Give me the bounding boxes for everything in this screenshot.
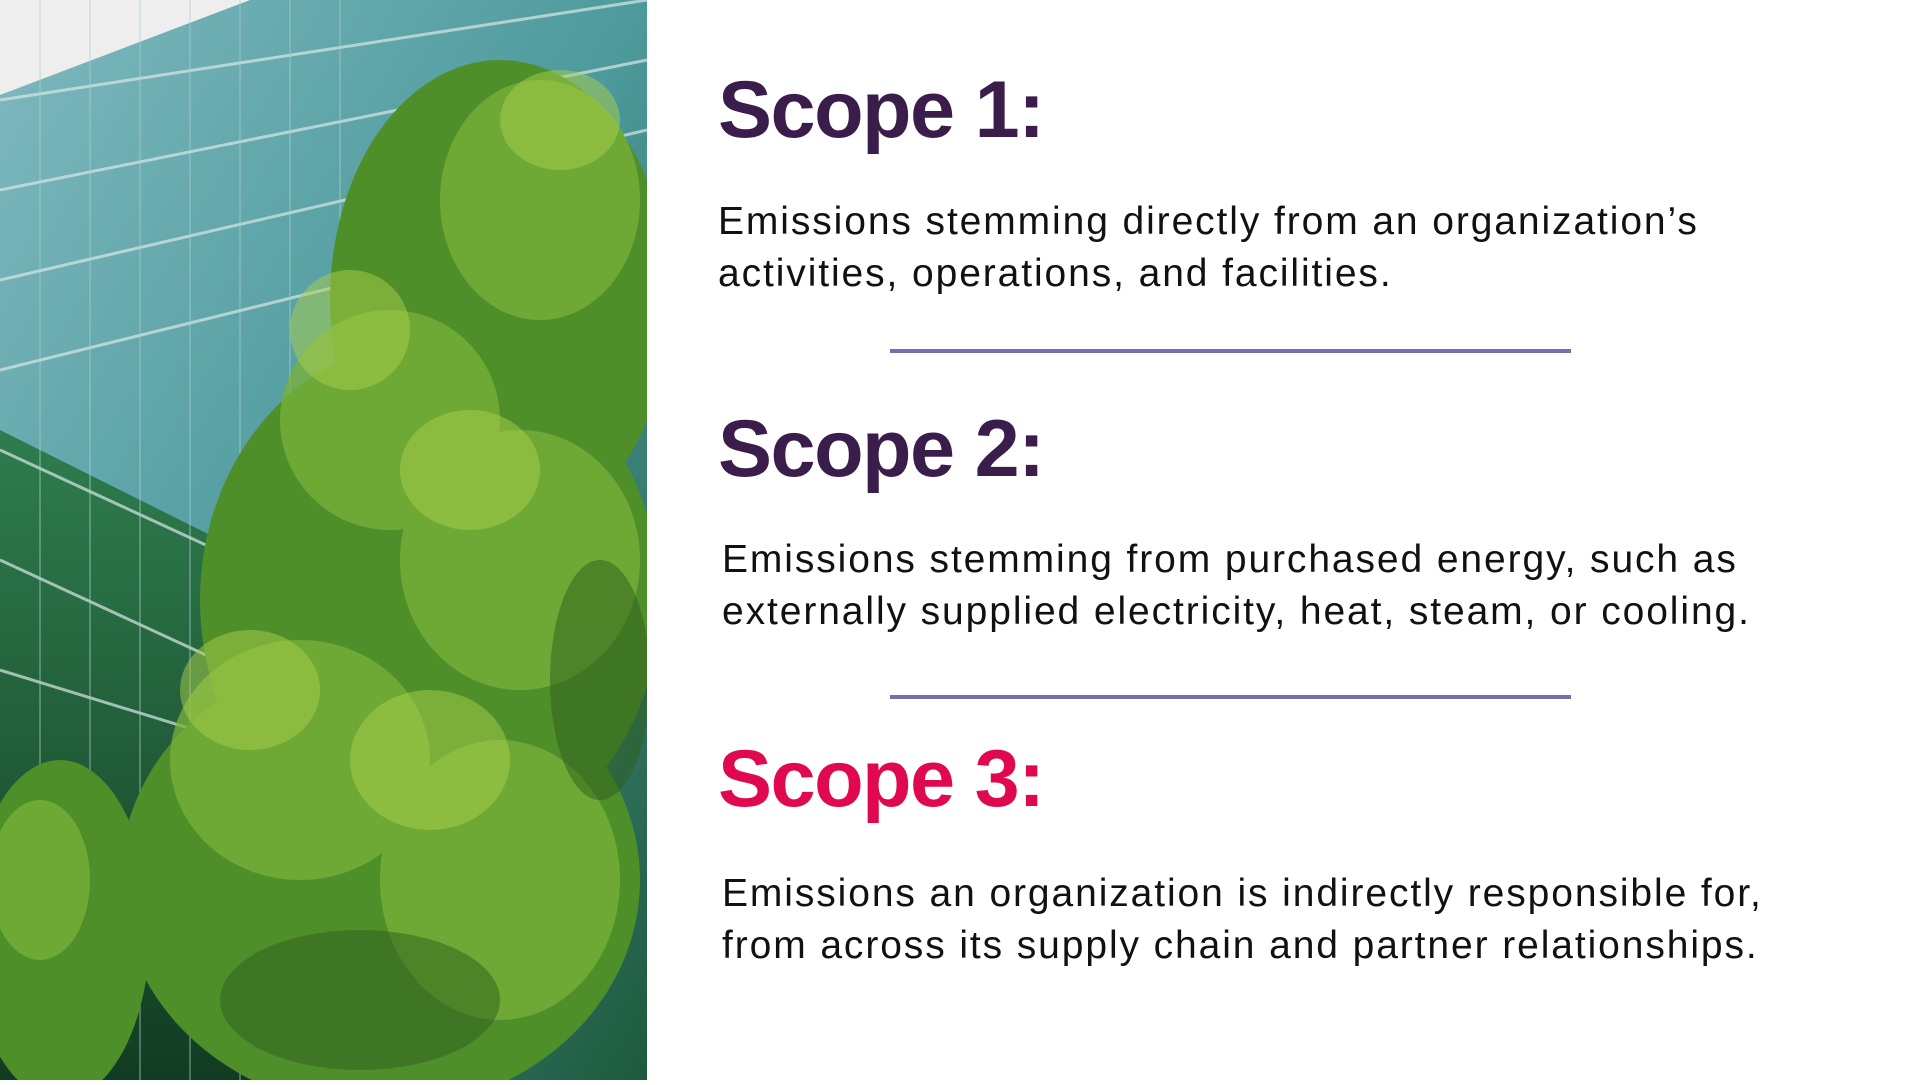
text block: Scope 2 description: Emissions stemming from purchased energy, such as: [722, 538, 1738, 581]
text block: Scope 3 description: [722, 872, 1763, 967]
text block: Scope 1 description: Emissions stemming directly from an organization’s: [718, 200, 1699, 243]
text block: Scope 1 description: activities, operations, and facilities.: [718, 252, 1393, 295]
heading: Scope 2: Scope 2:: [718, 404, 1044, 494]
text block: Scope 2 description: externally supplied electricity, heat, steam, or cooling.: [722, 590, 1751, 633]
photo: glass building with trees: [0, 0, 647, 1080]
heading: Scope 1: Scope 1:: [718, 65, 1044, 155]
heading: Scope 3: Scope 3:: [718, 734, 1044, 824]
text block: Scope 3 description: from across its supply chain and partner relationships.: [722, 924, 1759, 967]
text block: Scope 3 description: Emissions an organization is indirectly responsible for,: [722, 872, 1763, 915]
text block: Scope 2 description: [722, 538, 1751, 633]
text block: Scope 1 description: [718, 200, 1699, 295]
